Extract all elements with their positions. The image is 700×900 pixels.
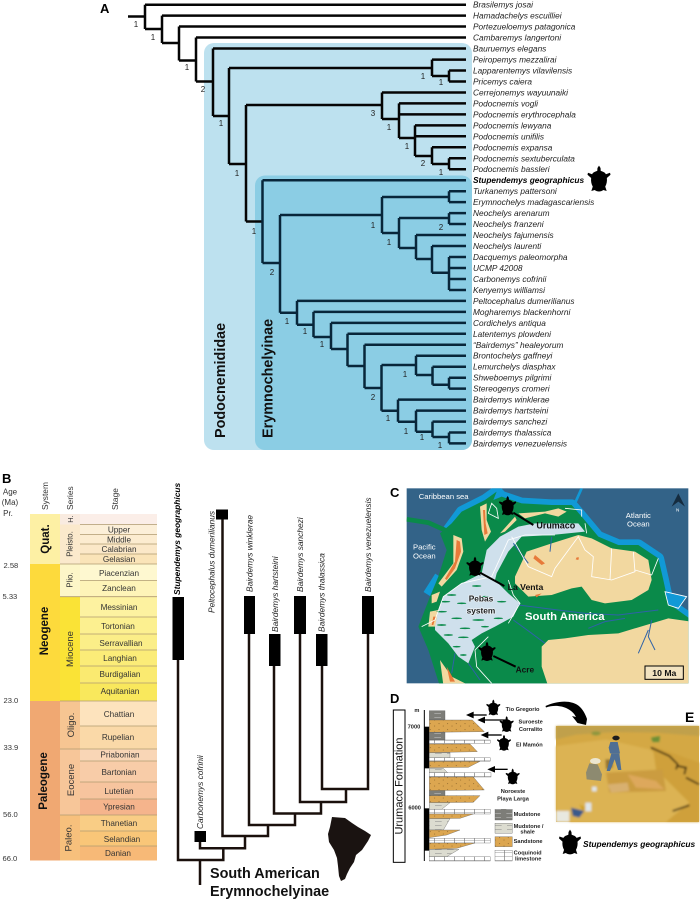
taxon labels: Portezueloemys patagonica xyxy=(473,22,576,32)
depth labels: 7000 xyxy=(408,725,420,731)
taxon labels: Bairdemys venezuelensis xyxy=(473,438,567,448)
taxon labels: Podocnemis lewyana xyxy=(473,120,552,130)
support values: 1 xyxy=(219,119,224,128)
support values: 1 xyxy=(386,414,391,423)
formation label box xyxy=(393,710,406,862)
taxon labels: Neochelys laurenti xyxy=(473,241,542,251)
tree branches within Erymnochelyinae xyxy=(262,180,466,443)
panel letter B: B xyxy=(2,471,11,486)
lithology legend: limestone xyxy=(515,856,541,862)
support values: 2 xyxy=(421,159,426,168)
support values: 1 xyxy=(404,427,409,436)
arrows to fossil horizons xyxy=(468,713,508,772)
ocean labels: Atlantic xyxy=(626,511,651,520)
taxon labels: Neochelys fajumensis xyxy=(473,230,554,240)
column headers xyxy=(40,482,120,510)
support values: 1 xyxy=(320,340,325,349)
support values: 1 xyxy=(185,63,190,72)
taxon labels: Cerrejonemys wayuunaiki xyxy=(473,88,569,98)
age values: 5.33 xyxy=(2,592,17,601)
stage column: Langhian xyxy=(103,654,137,663)
uplands: Brazilian shield xyxy=(542,618,692,687)
label: Pebas system: Pebas xyxy=(469,594,493,604)
stage column: Priabonian xyxy=(100,750,140,760)
support values: 1 xyxy=(420,433,425,442)
support values: 3 xyxy=(371,109,376,118)
rotated taxon labels: Bairdemys venezuelensis xyxy=(363,497,373,592)
system column: Neogene xyxy=(39,607,51,655)
taxon labels: Neochelys franzeni xyxy=(473,219,545,229)
political borders xyxy=(422,503,658,683)
rivers xyxy=(452,537,658,680)
taxon labels: Bairdemys hartsteini xyxy=(473,406,549,416)
land: Panama isthmus xyxy=(407,519,448,532)
heading: South American Erymnochelyinae: Erymnochelyinae xyxy=(210,884,329,900)
series column: Miocene xyxy=(65,631,76,667)
mountains: Andes orange xyxy=(432,510,579,682)
photo background xyxy=(556,726,699,822)
ocean labels: Pacific xyxy=(413,543,436,552)
mountains: Andes tan xyxy=(428,503,567,685)
series column: Oligo. xyxy=(66,713,77,737)
icon: turtle xyxy=(588,166,610,191)
age values: 2.58 xyxy=(4,561,18,570)
taxon labels: Bauruemys elegans xyxy=(473,44,546,54)
sediment layers xyxy=(429,711,491,861)
standing researcher xyxy=(607,736,621,771)
locality marker: Acre xyxy=(478,642,535,674)
rotated taxon labels: Stupendemys geographicus xyxy=(172,483,182,595)
stage column: Zanclean xyxy=(102,584,136,593)
support values: 1 xyxy=(405,142,410,151)
taxon labels: Latentemys plowdeni xyxy=(473,329,552,339)
series column: H. xyxy=(66,515,75,523)
stage column: Piacenzian xyxy=(99,569,139,578)
stage column: Chattian xyxy=(104,710,135,719)
taxon labels: UCMP 42008 xyxy=(473,263,523,273)
clade label: Podocnemididae: Podocnemididae xyxy=(213,323,229,438)
taxon labels: Neochelys arenarum xyxy=(473,208,550,218)
rotated taxon labels xyxy=(172,483,373,829)
locality marker: Urumaco xyxy=(499,496,576,531)
panel letter C: C xyxy=(390,485,400,500)
support values: 1 xyxy=(421,72,426,81)
panel letter A: A xyxy=(100,1,110,16)
taxon labels: Shweboemys pilgrimi xyxy=(473,373,553,383)
taxon labels: Pricemys caiera xyxy=(473,76,532,86)
depth labels: m xyxy=(414,708,419,714)
locality labels: Playa Larga xyxy=(497,796,530,802)
lithology legend: Coquinoid xyxy=(514,851,542,857)
scale box: 10 Ma xyxy=(645,666,683,679)
rotated taxon labels: Carbonemys cofrinii xyxy=(195,754,205,829)
tree branches xyxy=(178,519,368,885)
taxon labels: Bairdemys thalassica xyxy=(473,428,552,438)
support values: 1 xyxy=(387,123,392,132)
icon: north arrow xyxy=(672,493,685,512)
stage column: Thanetian xyxy=(101,819,138,828)
rotated taxon labels: Peltocephalus dumerilianus xyxy=(206,511,216,613)
taxon labels: Podocnemis vogli xyxy=(473,98,539,108)
panel: phylogenetic tree A xyxy=(128,0,610,450)
land: South America xyxy=(418,492,692,687)
depth labels xyxy=(408,708,421,812)
system column: Quat. xyxy=(40,524,52,554)
locality marker: La Venta: La Venta xyxy=(508,582,543,592)
icon: Stupendemys turtle xyxy=(559,830,581,854)
series column: Plio. xyxy=(66,572,74,588)
series column: Eocene xyxy=(66,764,77,796)
locality labels: El Mamón xyxy=(516,742,543,748)
taxon labels: “Bairdemys” healeyorum xyxy=(473,340,563,350)
caption: Stupendemys geographicus: Stupendemys geographicus xyxy=(583,839,695,849)
photo scene xyxy=(556,726,699,822)
stage column: Bartonian xyxy=(101,768,137,777)
locality labels: Suroeste xyxy=(519,720,543,726)
taxon labels: Podocnemis sextuberculata xyxy=(473,153,575,163)
locality labels xyxy=(497,707,543,802)
support values: 1 xyxy=(235,169,240,178)
rotated taxon labels: Bairdemys thalassica xyxy=(316,553,326,632)
clade background: Podocnemididae xyxy=(204,43,472,450)
taxon labels: Bairdemys sanchezi xyxy=(473,417,548,427)
clade label: Erymnochelyinae: Erymnochelyinae xyxy=(260,319,276,438)
taxon labels: Stereogenys cromeri xyxy=(473,384,551,394)
system column xyxy=(30,514,60,860)
delta islands xyxy=(665,592,687,608)
ocean labels: Ocean xyxy=(627,520,650,529)
age values: 23.0 xyxy=(4,696,18,705)
taxon labels: Lemurchelys diasphax xyxy=(473,362,556,372)
support values: 2 xyxy=(270,268,275,277)
taxon labels: Lapparentemys vilavilensis xyxy=(473,66,572,76)
support values: 1 xyxy=(134,20,139,29)
series column: Paleo. xyxy=(64,825,74,851)
locality labels: Corralito xyxy=(519,727,543,733)
stage column: Selandian xyxy=(104,835,141,844)
stage column: Gelasian xyxy=(103,555,136,564)
taxon labels: Kenyemys williamsi xyxy=(473,285,546,295)
taxon labels: Podocnemis erythrocephala xyxy=(473,109,576,119)
land masses and lakes xyxy=(407,488,692,687)
coastal shelf xyxy=(428,492,692,620)
lithology legend: Mudstone / xyxy=(514,824,544,830)
taxon labels: Cordichelys antiqua xyxy=(473,318,546,328)
support values: 1 xyxy=(438,441,443,450)
taxon labels: Peltocephalus dumerilianus xyxy=(473,296,574,306)
system column: Paleogene xyxy=(38,752,50,810)
support values: 1 xyxy=(303,327,308,336)
lithology legend xyxy=(495,809,544,862)
arrow: Tio Gregorio to field photo xyxy=(546,702,587,725)
icons: turtles xyxy=(486,699,520,784)
support values: 1 xyxy=(403,370,408,379)
ocean labels: Caribbean sea xyxy=(419,492,469,501)
ocean labels: Ocean xyxy=(413,551,436,560)
polarity bar xyxy=(424,710,429,861)
locality marker: Urumaco: Urumaco xyxy=(536,521,576,531)
rotated taxon labels: Bairdemys hartsteini xyxy=(270,555,280,632)
support values: 1 xyxy=(371,221,376,230)
lithology legend: shale xyxy=(520,829,535,835)
stage column: Calabrian xyxy=(101,545,137,554)
taxon labels: Mogharemys blackenhorni xyxy=(473,307,571,317)
column headers: Stage xyxy=(110,488,120,510)
formation label box: Urumaco Formation xyxy=(394,737,406,835)
panel: excavation field photo xyxy=(556,726,699,822)
taxon labels: Erymnochelys madagascariensis xyxy=(473,197,594,207)
taxon labels: Podocnemis unifilis xyxy=(473,131,544,141)
taxon labels: Cambaremys langertoni xyxy=(473,33,562,43)
stage column: Tortonian xyxy=(101,622,135,631)
stage column: Messinian xyxy=(101,603,138,612)
support values: 2 xyxy=(371,393,376,402)
taxon labels: Podocnemis bassleri xyxy=(473,164,551,174)
label: Pebas system: system xyxy=(467,605,495,615)
panel letter D: D xyxy=(390,691,399,706)
ocean labels xyxy=(413,492,651,560)
age column header: Pr. xyxy=(3,509,13,518)
icon: north arrow: N xyxy=(676,507,679,512)
support values: 1 xyxy=(151,33,156,42)
stage column: Danian xyxy=(105,849,131,858)
taxon labels: Carbonemys cofrinii xyxy=(473,274,547,284)
taxon labels: Stupendemys geographicus xyxy=(473,175,584,185)
shelf river xyxy=(576,488,582,502)
taxon labels: Dacquemys paleomorpha xyxy=(473,252,568,262)
support values: 2 xyxy=(201,85,206,94)
clade background: Erymnochelyinae xyxy=(255,176,472,450)
Pebas vegetation dashes xyxy=(436,585,506,656)
taxon labels xyxy=(473,0,594,448)
series column: Pleisto. xyxy=(66,531,74,557)
uplands: Guiana shield xyxy=(515,535,652,603)
support values: 1 xyxy=(439,168,444,177)
age column header: (Ma) xyxy=(2,498,19,507)
age column header xyxy=(2,488,19,518)
depth labels: 6000 xyxy=(408,806,421,812)
support values xyxy=(134,20,444,450)
column headers: System xyxy=(40,482,50,510)
stage column xyxy=(60,514,157,860)
support values: 1 xyxy=(439,78,444,87)
taxon labels: Bairdemys winklerae xyxy=(473,395,550,405)
taxon labels: Podocnemis expansa xyxy=(473,142,553,152)
support values: 1 xyxy=(387,238,392,247)
panel: Urumaco stratigraphic column xyxy=(393,699,544,862)
locality labels: Tio Gregorio xyxy=(506,707,540,713)
ocean background xyxy=(407,488,688,683)
locality labels: Noroeste xyxy=(501,789,525,795)
lithology legend: Sandstone xyxy=(514,839,543,845)
stage column: Ypresian xyxy=(103,802,135,812)
panel: palaeogeographic map xyxy=(407,488,692,687)
series column xyxy=(60,514,80,860)
age values: 66.0 xyxy=(2,854,17,863)
taxon labels: Peiropemys mezzalirai xyxy=(473,54,558,64)
tree branches outside Erymnochelyinae xyxy=(128,5,466,222)
wetland: Pebas system xyxy=(435,523,585,663)
taxon labels: Brontochelys gaffneyi xyxy=(473,351,553,361)
column headers: Series xyxy=(65,486,75,510)
age values xyxy=(2,561,18,863)
scale box: 10 Ma: 10 Ma xyxy=(652,668,677,678)
support values: 1 xyxy=(285,317,290,326)
stage column: Middle xyxy=(107,536,132,544)
rotated taxon labels: Bairdemys sanchezi xyxy=(295,516,305,592)
lithology legend: Mudstone xyxy=(514,812,540,818)
taxon labels: Turkanemys pattersoni xyxy=(473,186,558,196)
locality marker: La Venta xyxy=(466,557,543,592)
stage column: Serravallian xyxy=(99,639,143,648)
support values: 2 xyxy=(439,223,444,232)
seated researcher xyxy=(586,758,602,781)
stage column: Lutetian xyxy=(104,787,134,796)
panel letter E: E xyxy=(685,709,694,725)
panel: South American Erymnochelyinae time tree xyxy=(172,483,374,900)
heading: South American Erymnochelyinae: South American xyxy=(210,866,320,882)
taxon labels: Hamadachelys escuilliei xyxy=(473,11,563,21)
age values: 56.0 xyxy=(3,810,18,819)
locality marker: Acre: Acre xyxy=(516,664,535,674)
stage column: Upper xyxy=(108,526,130,534)
support values: 1 xyxy=(252,227,257,236)
age column header: Age xyxy=(3,488,18,496)
age values: 33.9 xyxy=(4,743,18,752)
stage column: Burdigalian xyxy=(100,670,141,679)
stage column: Rupelian xyxy=(102,733,135,742)
rotated taxon labels: Bairdemys winklerae xyxy=(244,515,254,592)
panel: geologic time scale xyxy=(2,482,157,863)
stratigraphic range bars xyxy=(172,510,374,842)
label: South America: South America xyxy=(525,611,605,623)
stage column: Aquitanian xyxy=(101,687,140,696)
icon: South America silhouette xyxy=(328,817,371,881)
